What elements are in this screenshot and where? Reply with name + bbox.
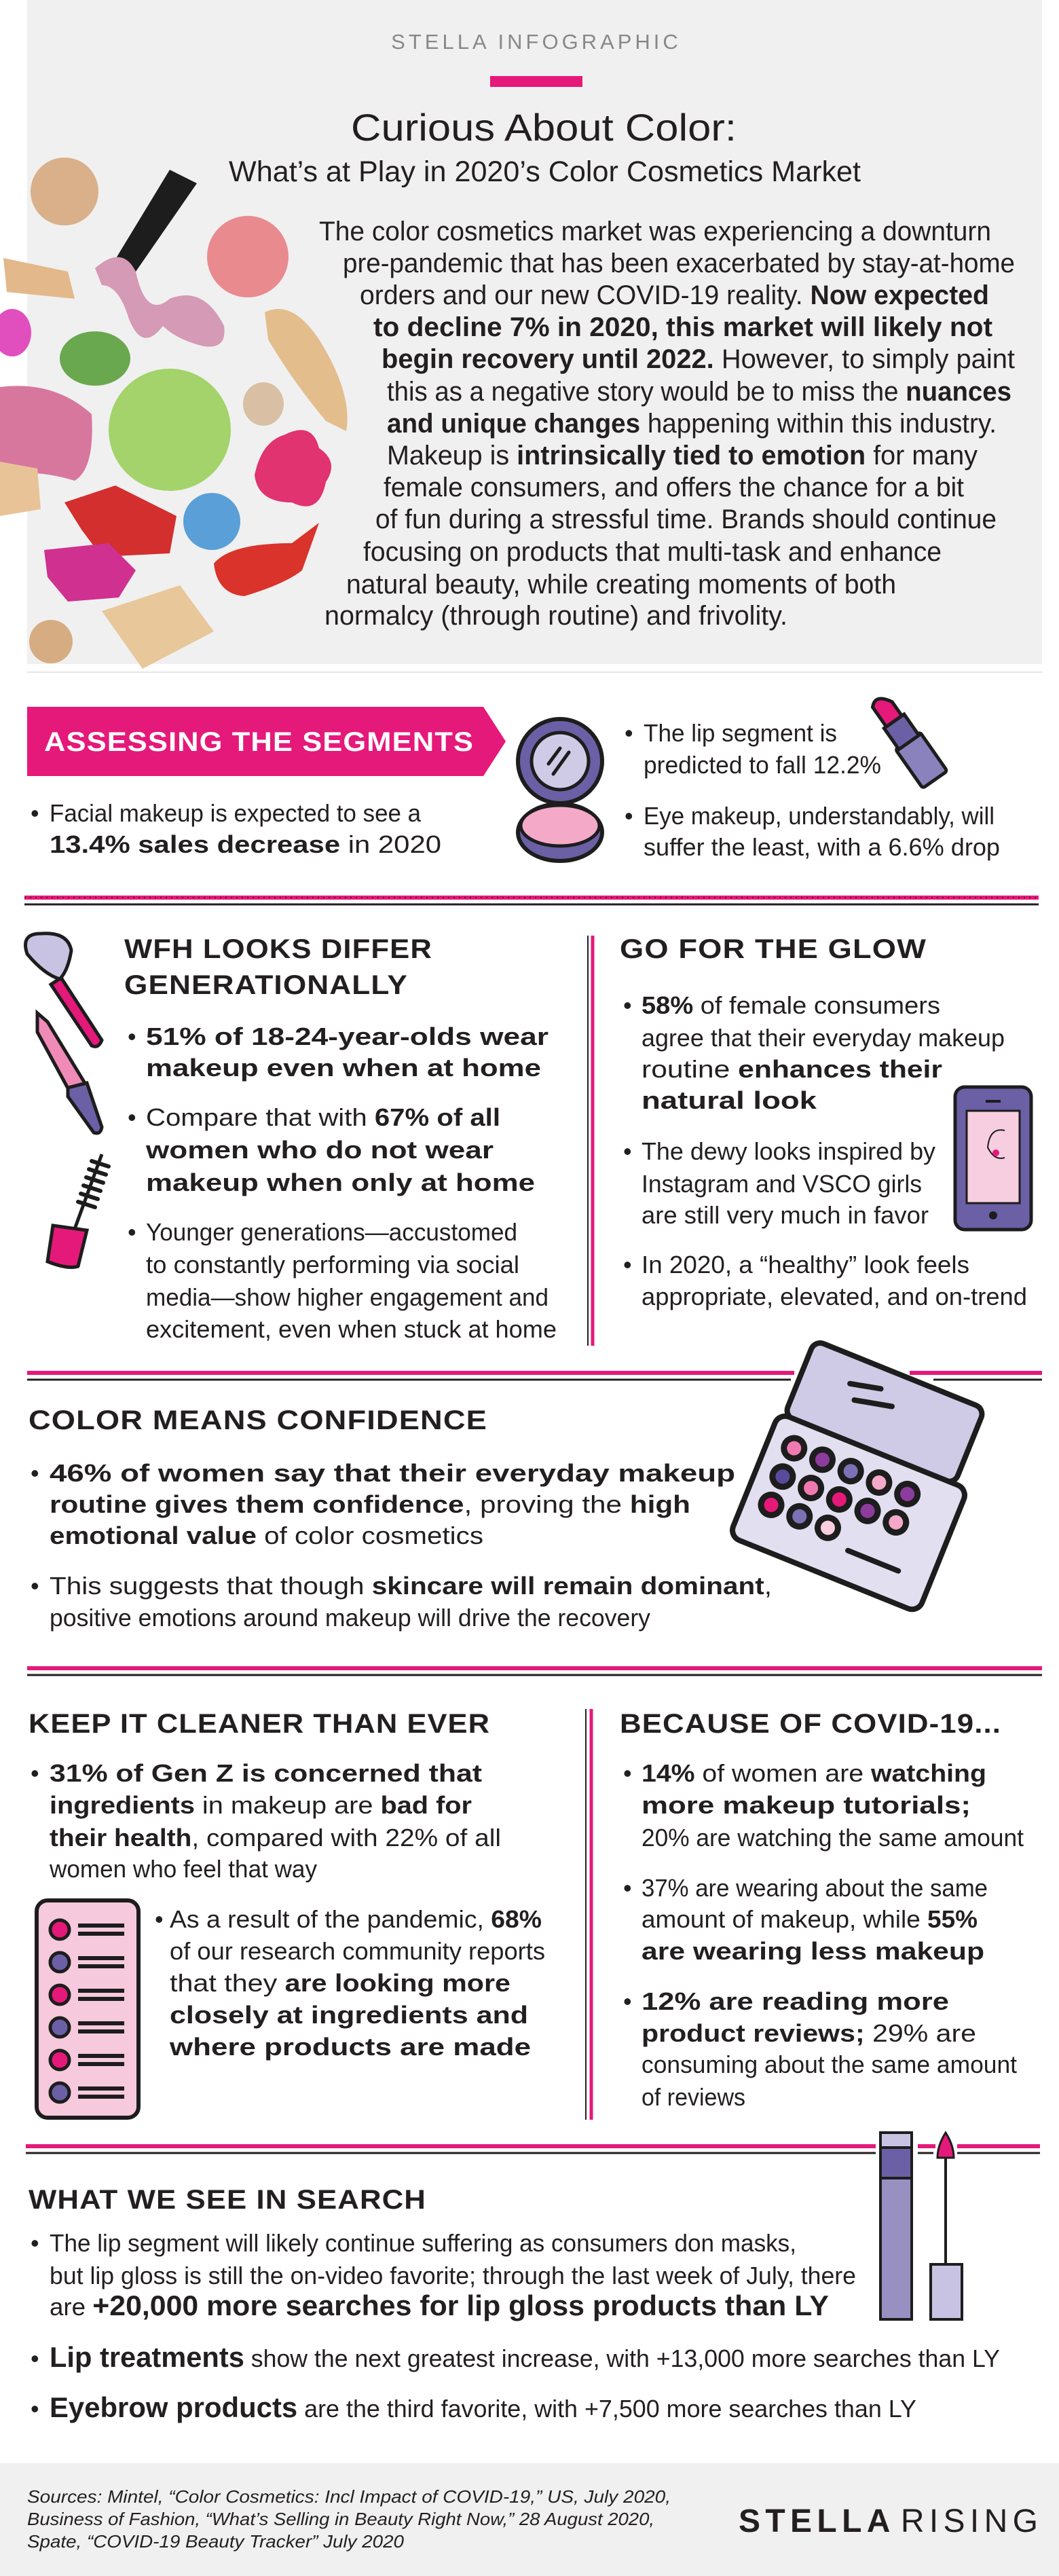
bullets: pandemic ingredients: that they are looking more (170, 1969, 510, 1997)
bullets: confidence: • (31, 1459, 39, 1487)
icon: lip liner (37, 1013, 102, 1133)
intro paragraph: focusing on products that multi-task and enhance (363, 537, 942, 567)
bullets: WFH: Compare that with 67% of all (146, 1103, 500, 1131)
bullets: covid: • (623, 1874, 632, 1902)
bullets: glow: natural look (642, 1086, 817, 1114)
icon: lipstick (866, 690, 947, 788)
text: lip segment (625, 719, 881, 779)
intro paragraph: normalcy (through routine) and frivolity. (324, 601, 787, 631)
intro paragraph: this as a negative story would be to miss the nuances (387, 377, 1011, 407)
text: eye makeup: Eye makeup, understandably, will (644, 802, 995, 830)
icon: lip gloss tube (880, 2133, 962, 2319)
bullets: covid: • (623, 1759, 632, 1787)
bullets: search: Eyebrow products are the third favorite, with +7,500 more searches than LY (50, 2391, 916, 2423)
header panel (27, 0, 1042, 672)
bullets: WFH: 51% of 18-24-year-olds wear (146, 1023, 549, 1050)
bullets: search: are +20,000 more searches for lip gloss products than LY (50, 2289, 829, 2321)
banner: assessing the segments (27, 707, 506, 776)
bullets: search (31, 2229, 1000, 2423)
bullets: covid: are wearing less makeup (642, 1937, 984, 1965)
bullets: cleaner: their health , compared with 22% of all (50, 1824, 501, 1852)
bullets: glow: are still very much in favor (642, 1201, 929, 1229)
bullets: confidence: emotional value of color cosmetics (50, 1522, 483, 1549)
intro paragraph: orders and our new COVID-19 reality. Now expected (360, 280, 989, 310)
bullets: cleaner: • (31, 1759, 39, 1787)
bullets: pandemic ingredients (155, 1905, 545, 2061)
heading: color means confidence: COLOR MEANS CONFIDENCE (29, 1405, 487, 1435)
bullets: WFH: makeup even when at home (146, 1054, 541, 1082)
bullets: WFH: • (128, 1218, 136, 1246)
bullets: cleaner: 31% of Gen Z is concerned that (50, 1759, 482, 1787)
bullets: pandemic ingredients: of our research community reports (170, 1937, 545, 1965)
logo: stella rising: STELLARISING (739, 2503, 1042, 2539)
bullets: covid (623, 1759, 1024, 2111)
bullets: WFH: excitement, even when stuck at home (146, 1315, 557, 1343)
intro paragraph: of fun during a stressful time. Brands should continue (375, 504, 997, 534)
divider 1 (24, 898, 1039, 904)
bullets: search: • (31, 2395, 39, 2423)
sources: Spate, “COVID-19 Beauty Tracker” July 2020 (27, 2531, 405, 2552)
bullets: covid: product reviews; 29% are (642, 2019, 976, 2047)
title: Curious About Color: (351, 106, 737, 149)
text: eye makeup: • (625, 802, 633, 830)
bullets: WFH: women who do not wear (145, 1136, 494, 1164)
bullets: WFH: to constantly performing via social (146, 1251, 519, 1278)
intro paragraph: female consumers, and offers the chance for a bit (384, 473, 964, 502)
text: facial makeup (31, 799, 441, 858)
bullets: pandemic ingredients: • (155, 1905, 164, 1933)
intro paragraph: pre-pandemic that has been exacerbated by stay-at-home (343, 249, 1015, 278)
bullets: confidence: positive emotions around makeup will drive the recovery (50, 1604, 650, 1632)
bullets: covid: • (623, 1987, 632, 2015)
bullets: search: • (31, 2344, 39, 2372)
bullets: WFH: makeup when only at home (146, 1169, 535, 1196)
bullets: glow: • (623, 991, 632, 1019)
text: lip segment: The lip segment is (644, 719, 837, 747)
bullets: glow: routine enhances their (642, 1055, 942, 1083)
divider 4 (26, 2146, 1040, 2153)
bullets: glow (623, 991, 1027, 1310)
pink accent bar (490, 76, 582, 87)
bullets: covid: consuming about the same amount (642, 2050, 1017, 2078)
text: facial makeup: Facial makeup is expected to see a (50, 799, 422, 827)
icon: mascara (48, 1154, 109, 1267)
sources (27, 2486, 671, 2552)
text: facial makeup: • (31, 799, 39, 827)
bullets: search: The lip segment will likely continue suffering as consumers don masks, (50, 2229, 796, 2257)
text: eye makeup: suffer the least, with a 6.6% drop (644, 833, 1000, 861)
bullets: WFH: Younger generations—accustomed (146, 1218, 517, 1246)
heading: WFH looks: WFH LOOKS DIFFER (124, 934, 432, 964)
bullets: covid: of reviews (642, 2083, 745, 2111)
footer panel (0, 2463, 1059, 2576)
bullets: search: but lip gloss is still the on-video favorite; through the last week of July, there (50, 2262, 856, 2289)
bullets: pandemic ingredients: As a result of the pandemic, 68% (170, 1905, 542, 1933)
vertical divider 2 (586, 1709, 591, 2120)
icon: checklist (37, 1900, 138, 2118)
bullets: cleaner: women who feel that way (49, 1855, 317, 1883)
icon: compact (518, 719, 602, 861)
bullets: confidence: 46% of women say that their everyday makeup (50, 1459, 735, 1487)
bullets: glow: The dewy looks inspired by (642, 1137, 935, 1165)
bullets: glow: agree that their everyday makeup (642, 1024, 1005, 1052)
cosmetic swatches illustration (0, 158, 348, 669)
bullets: search: Lip treatments show the next greatest increase, with +13,000 more searches than LY (50, 2341, 1000, 2373)
bullets: cleaner (31, 1759, 501, 1883)
icon: phone (955, 1087, 1031, 1230)
bullets: pandemic ingredients: where products are made (169, 2033, 531, 2061)
bullets: covid: more makeup tutorials; (642, 1791, 971, 1819)
vertical divider (588, 936, 593, 1346)
intro paragraph: to decline 7% in 2020, this market will likely not (373, 312, 992, 342)
bullets: WFH: media—show higher engagement and (146, 1283, 549, 1311)
bullets: confidence: This suggests that though skincare will remain dominant , (50, 1572, 772, 1600)
bullets: covid: 14% of women are watching (642, 1759, 986, 1787)
title (229, 106, 861, 188)
bullets: glow: appropriate, elevated, and on-trend (642, 1283, 1027, 1310)
icon: blush brush (26, 934, 102, 1046)
eyebrow label: STELLA INFOGRAPHIC (391, 30, 682, 54)
heading: WFH looks: GENERATIONALLY (124, 970, 408, 1000)
intro paragraph: and unique changes happening within this industry. (387, 409, 997, 439)
divider 2 (27, 1373, 1042, 1380)
text: eye makeup (625, 802, 1000, 861)
divider 3 (27, 1668, 1042, 1675)
bullets: covid: amount of makeup, while 55% (642, 1905, 978, 1933)
heading: WFH looks (124, 934, 432, 1000)
bullets: covid: 20% are watching the same amount (642, 1824, 1024, 1852)
bullets: WFH: • (128, 1023, 136, 1050)
bullets: glow: In 2020, a “healthy” look feels (642, 1251, 969, 1278)
bullets: WFH (128, 1023, 557, 1343)
icon: eyeshadow palette (729, 1340, 985, 1613)
intro paragraph: Makeup is intrinsically tied to emotion for many (387, 441, 978, 471)
text: facial makeup: 13.4% sales decrease in 2020 (50, 830, 441, 858)
text: lip segment: • (625, 719, 633, 747)
bullets: covid: 37% are wearing about the same (642, 1874, 988, 1902)
bullets: confidence: • (31, 1572, 39, 1600)
heading: keep it cleaner: KEEP IT CLEANER THAN EVER (29, 1709, 490, 1739)
bullets: glow: • (623, 1251, 632, 1278)
heading: go for the glow: GO FOR THE GLOW (620, 934, 927, 964)
bullets: confidence: routine gives them confidence , proving the high (50, 1490, 690, 1518)
text: lip segment: predicted to fall 12.2% (644, 751, 881, 779)
intro paragraph: begin recovery until 2022. However, to simply paint (382, 344, 1015, 374)
title: What’s at Play in 2020’s Color Cosmetics Market (229, 155, 861, 188)
bullets: glow: 58% of female consumers (642, 991, 940, 1019)
bullets: confidence (31, 1459, 772, 1632)
intro paragraph: natural beauty, while creating moments of both (346, 570, 896, 600)
bullets: glow: Instagram and VSCO girls (642, 1170, 922, 1198)
sources: Sources: Mintel, “Color Cosmetics: Incl Impact of COVID-19,” US, July 2020, (27, 2486, 671, 2507)
bullets: WFH: • (128, 1103, 136, 1131)
banner: assessing the segments: ASSESSING THE SEGMENTS (44, 727, 474, 757)
bullets: glow: • (623, 1137, 632, 1165)
bullets: search: • (31, 2229, 39, 2257)
intro paragraph (319, 217, 1015, 631)
bullets: pandemic ingredients: closely at ingredients and (170, 2001, 528, 2029)
bullets: covid: 12% are reading more (642, 1987, 949, 2015)
bullets: cleaner: ingredients in makeup are bad for (50, 1791, 472, 1819)
heading: what we see in search: WHAT WE SEE IN SEARCH (29, 2185, 426, 2215)
sources: Business of Fashion, “What’s Selling in Beauty Right Now,” 28 August 2020, (27, 2509, 654, 2529)
intro paragraph: The color cosmetics market was experiencing a downturn (319, 217, 991, 246)
heading: because of covid: BECAUSE OF COVID-19... (620, 1709, 1001, 1739)
